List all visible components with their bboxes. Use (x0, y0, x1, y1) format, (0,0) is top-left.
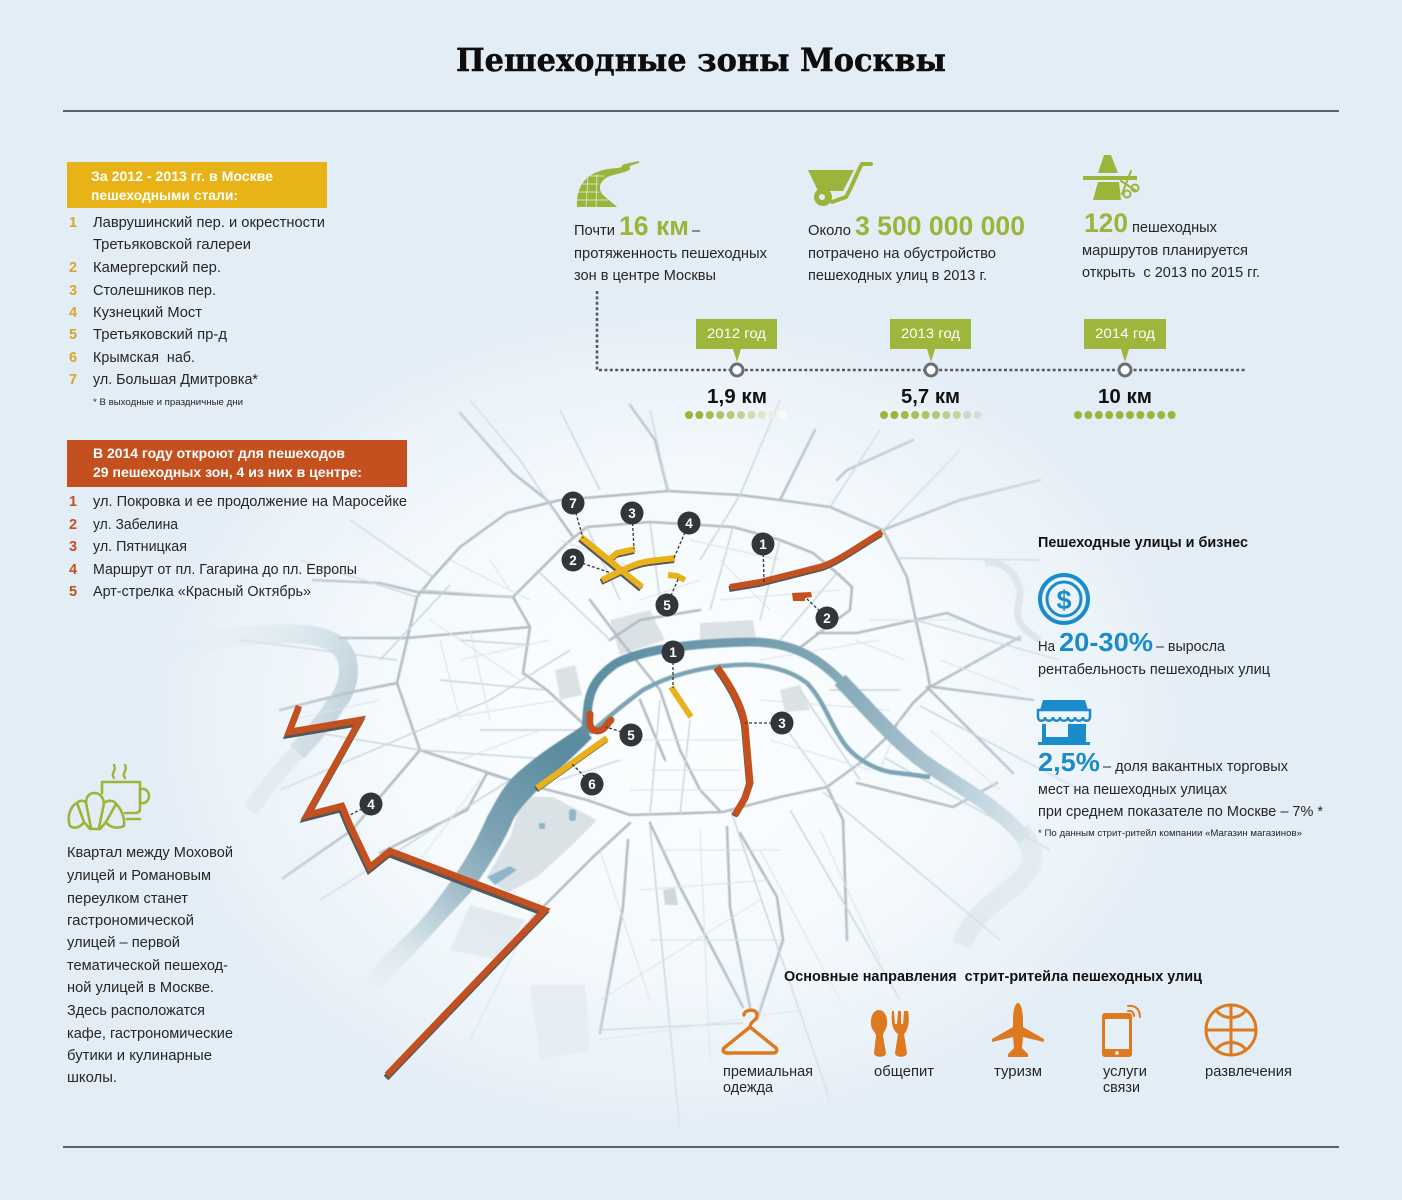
list: planned zones: 2 (69, 517, 77, 533)
footnote: weekends: * В выходные и праздничные дни (93, 397, 243, 408)
stat text: 3 500 000 000 (855, 211, 1025, 241)
icon: ball (1206, 1005, 1256, 1055)
heading box: yellow (67, 162, 327, 208)
item: communication services: услуги (1103, 1064, 1147, 1080)
badge 3 orange route: 3 (778, 716, 786, 731)
text: gastronomic street: кафе, гастрономические (67, 1026, 233, 1042)
milestone 2012: 1,9 км (707, 386, 767, 408)
badge 5 orange route: 5 (627, 728, 635, 743)
milestone 2014: 10 км (1098, 386, 1152, 408)
stat text (574, 211, 768, 284)
footnote: source: * По данным стрит-ритейл компании «Магазин магазинов» (1038, 828, 1302, 839)
stat text (808, 211, 1025, 284)
list: opened streets: Столешников пер. (93, 283, 216, 299)
item: premium clothing: премиальная (723, 1064, 813, 1080)
badge 5 orange route (620, 724, 642, 746)
panel: 2014 pedestrian zones (67, 440, 407, 600)
item: tourism (992, 1003, 1044, 1080)
stat: profitability: рентабельность пешеходных улиц (1038, 662, 1270, 678)
stat: profitability (1038, 627, 1270, 678)
stat text: протяженность пешеходных (574, 246, 768, 262)
text: gastronomic street: Квартал между Моховой (67, 845, 233, 861)
minor roads (240, 400, 1080, 1130)
route 5: Red October orange (590, 714, 611, 731)
route 2: Zabelina orange (792, 592, 812, 601)
badge 7: 7 (569, 496, 577, 511)
stat: profitability: – выросла (1156, 639, 1226, 655)
item: entertainment: развлечения (1205, 1064, 1292, 1080)
item: catering: общепит (874, 1064, 934, 1080)
text: gastronomic street: улицей – первой (67, 935, 180, 951)
routes on map (288, 532, 882, 1078)
icon: smartphone (1102, 1006, 1140, 1057)
badge 4 (678, 512, 700, 534)
list: planned zones: 1 (69, 494, 77, 510)
icon: dollar coin (1040, 575, 1088, 623)
text: gastronomic street (67, 845, 233, 1086)
badge 3 (620, 502, 644, 524)
panel: street retail directions (723, 969, 1292, 1096)
badge 2 (562, 548, 584, 572)
list: opened streets: Лаврушинский пер. и окрестности (93, 215, 325, 231)
panel: 2012-2013 pedestrian streets (67, 162, 327, 408)
badge 6 (580, 772, 604, 796)
milestone 2013 (880, 319, 982, 419)
text: gastronomic street: гастрономической (67, 913, 194, 929)
heading box: yellow: За 2012 - 2013 гг. в Москве (91, 168, 273, 184)
canal (590, 665, 930, 777)
badge 1 yellow route: 1 (669, 645, 677, 660)
badge 1 orange route: 1 (759, 537, 767, 552)
badge 4 orange route: 4 (367, 797, 375, 812)
badge 4 orange route (360, 792, 382, 816)
milestone 2014 (1074, 319, 1176, 419)
stat: vacancy: при среднем показателе по Москве – 7% * (1038, 804, 1323, 820)
icon: wheelbarrow (808, 164, 871, 206)
stat: 120 routes (1082, 155, 1260, 281)
yellow streets group (536, 537, 691, 790)
major roads (397, 491, 930, 815)
list: opened streets: ул. Большая Дмитровка* (93, 372, 258, 388)
icon: storefront (1038, 700, 1090, 745)
text: gastronomic street: ной улицей в Москве. (67, 980, 214, 996)
list: opened streets: Третьяковский пр-д (93, 327, 228, 343)
badge 2 orange route: 2 (823, 611, 831, 626)
stat text: 16 км (619, 211, 689, 241)
stat text: Около (808, 223, 851, 239)
river Moskva: lower wide reach (380, 726, 592, 974)
heading: Пешеходные улицы и бизнес (1038, 535, 1248, 551)
list: planned zones: ул. Покровка и ее продолжение на Маросейке (93, 494, 407, 510)
icon: dollar coin: $ (1056, 585, 1072, 615)
stat: 3.5 billion (808, 164, 1025, 284)
stat: vacancy: мест на пешеходных улицах (1038, 782, 1228, 798)
icon: brick road (577, 161, 639, 207)
text: gastronomic street: бутики и кулинарные (67, 1048, 212, 1064)
faded outer river (255, 624, 358, 758)
item: communication services (1102, 1006, 1147, 1096)
item: communication services: связи (1103, 1080, 1140, 1096)
text: gastronomic street: переулком станет (67, 891, 188, 907)
badge 2 orange route (816, 606, 838, 630)
list: opened streets: 7 (69, 372, 77, 388)
timeline (597, 291, 1245, 419)
route 4: orange Gagarin to Europe square (288, 706, 545, 1078)
list: opened streets: Камергерский пер. (93, 260, 221, 276)
text: gastronomic street: школы. (67, 1070, 117, 1086)
stat: vacancy: – доля вакантных торговых (1103, 759, 1289, 775)
badge 2: 2 (569, 553, 577, 568)
panel: gastronomic street (67, 765, 233, 1086)
river Moskva: upper bend (584, 642, 840, 735)
list: opened streets: Кузнецкий Мост (93, 305, 202, 321)
list: planned zones (69, 494, 407, 600)
stat text: маршрутов планируется (1082, 243, 1248, 259)
list: opened streets: 5 (69, 327, 77, 343)
list: planned zones: 3 (69, 539, 77, 555)
map callouts (350, 492, 838, 816)
milestone 2013: 2013 год (901, 325, 960, 341)
badge 1 orange route (752, 532, 774, 556)
heading box: yellow: пешеходными стали: (91, 187, 238, 203)
badge 3: 3 (628, 506, 636, 521)
badge 3 orange route (770, 712, 794, 734)
text: gastronomic street: Здесь расположатся (67, 1003, 205, 1019)
stat: 16 km (574, 161, 768, 284)
list: opened streets: 1 (69, 215, 77, 231)
badge 5 (656, 594, 678, 616)
stat text (1082, 208, 1260, 281)
list: planned zones: 5 (69, 584, 77, 600)
stat text: открыть с 2013 по 2015 гг. (1082, 265, 1260, 281)
item: entertainment (1205, 1005, 1292, 1080)
milestone 2012 (685, 319, 787, 419)
list: planned zones: Арт-стрелка «Красный Октябрь» (93, 584, 311, 600)
icon: coffee and croissant (69, 765, 149, 829)
stat text: зон в центре Москвы (574, 268, 716, 284)
stat text: Почти (574, 223, 615, 239)
icon: plane (992, 1003, 1044, 1057)
heading: Основные направления стрит-ритейла пешеходных улиц (784, 969, 1202, 985)
heading box: orange (67, 440, 407, 487)
icon: spoon and fork (871, 1010, 909, 1057)
stat text: 120 (1084, 208, 1128, 238)
list: opened streets: Крымская наб. (93, 350, 195, 366)
text: gastronomic street: улицей и Романовым (67, 868, 211, 884)
stat text: пешеходных (1132, 220, 1218, 236)
stat text: потрачено на обустройство (808, 246, 996, 262)
list: opened streets: 4 (69, 305, 77, 321)
list: planned zones: Маршрут от пл. Гагарина до пл. Европы (93, 562, 357, 578)
list: planned zones: ул. Пятницкая (93, 539, 187, 555)
icon: road and scissors (1083, 155, 1138, 200)
stat: vacancy (1038, 747, 1323, 820)
item: catering (871, 1010, 934, 1080)
list: opened streets: 2 (69, 260, 77, 276)
divider rules (63, 111, 1339, 1147)
list: planned zones: ул. Забелина (93, 517, 179, 533)
badge 7 (562, 492, 584, 514)
item: tourism: туризм (994, 1064, 1042, 1080)
pool patches (487, 809, 576, 885)
milestone 2012: 2012 год (707, 325, 766, 341)
list: opened streets (69, 215, 325, 388)
list: opened streets: 6 (69, 350, 77, 366)
text: gastronomic street: тематической пешеход- (67, 958, 228, 974)
panel: pedestrian streets and business (1038, 535, 1323, 839)
list: planned zones: 4 (69, 562, 77, 578)
title: Пешеходные зоны Москвы (456, 41, 946, 79)
badge 5: 5 (663, 598, 671, 613)
badge 1 yellow route (662, 640, 684, 664)
icon: hanger (723, 1010, 777, 1053)
milestone 2014: 2014 год (1095, 325, 1155, 341)
leader lines (350, 503, 827, 815)
stat: vacancy: 2,5% (1038, 747, 1100, 777)
heading box: orange: 29 пешеходных зон, 4 из них в центре: (93, 464, 362, 480)
map of Moscow (214, 362, 1124, 1128)
route 1: Pokrovka orange (729, 532, 882, 589)
stat text: – (692, 223, 701, 239)
list: opened streets: 3 (69, 283, 77, 299)
item: premium clothing (723, 1010, 813, 1096)
river Moskva: eastern reach (840, 680, 1025, 838)
milestone 2013: 5,7 км (901, 386, 960, 408)
item: premium clothing: одежда (723, 1080, 774, 1096)
route 3: Pyatnitskaya orange (716, 667, 750, 816)
stat: profitability: 20-30% (1059, 627, 1153, 657)
city grey patches (450, 610, 810, 1060)
list: opened streets: Третьяковской галереи (93, 237, 251, 253)
badge 6: 6 (588, 777, 596, 792)
heading box: orange: В 2014 году откроют для пешеходов (93, 445, 345, 461)
badge 4: 4 (685, 516, 693, 531)
stat text: пешеходных улиц в 2013 г. (808, 268, 987, 284)
stat: profitability: На (1038, 639, 1056, 655)
